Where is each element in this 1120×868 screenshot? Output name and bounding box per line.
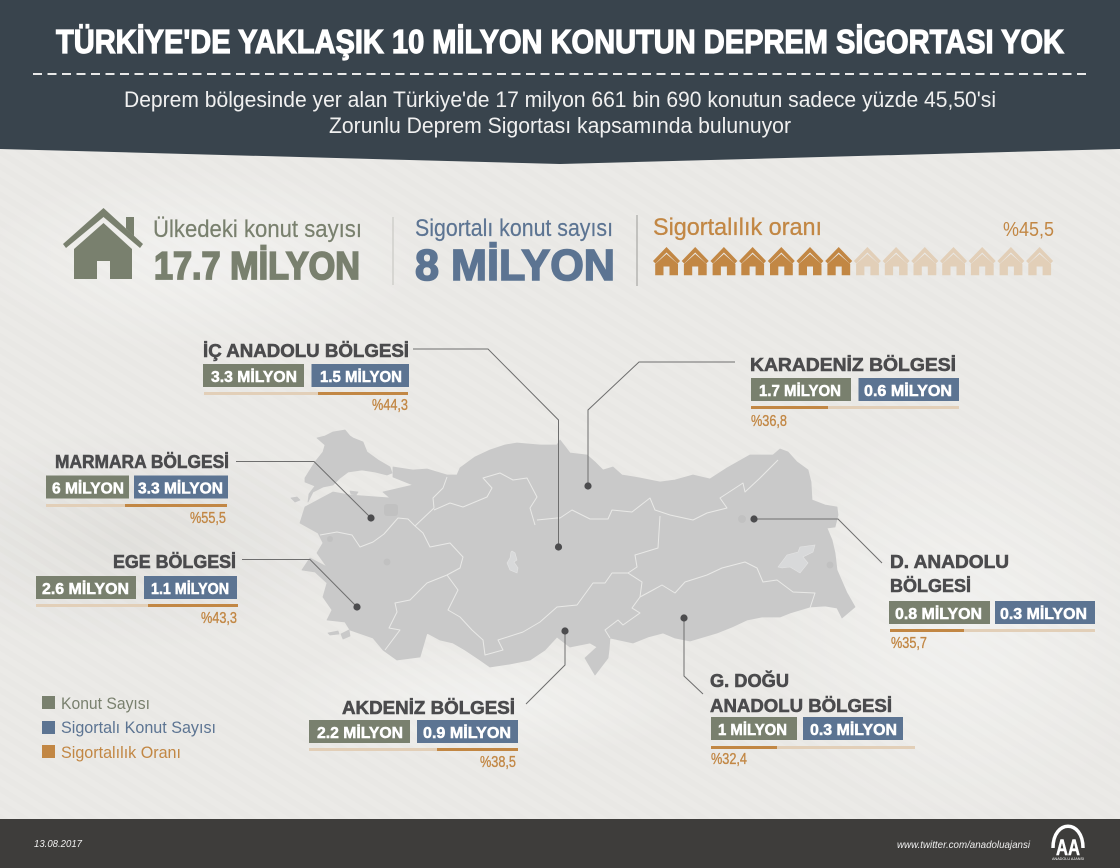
header banner xyxy=(0,0,1120,164)
rate bar: %32,4 xyxy=(711,751,747,768)
value boxes: 6 MİLYON xyxy=(52,480,124,498)
connector xyxy=(413,349,558,547)
connector xyxy=(242,560,357,607)
heading xyxy=(890,551,1009,596)
rate bar: %44,3 xyxy=(372,397,408,414)
subtitle xyxy=(124,87,996,138)
value boxes: 3.3 MİLYON xyxy=(211,368,297,386)
subtitle: Deprem bölgesinde yer alan Türkiye'de 17 milyon 661 bin 690 konutun sadece yüzde 45,50'si xyxy=(124,87,996,112)
connector xyxy=(236,462,371,518)
rate bar xyxy=(36,604,238,627)
rate bar xyxy=(309,748,518,771)
value boxes: 0.3 MİLYON xyxy=(810,721,897,739)
logo: Anadolu Ajansı: AA xyxy=(1056,835,1080,860)
connector xyxy=(754,519,882,563)
rate bar xyxy=(890,629,1095,652)
source link: www.twitter.com/anadoluajansi xyxy=(897,839,1031,851)
value: 17.7 MİLYON xyxy=(154,245,360,288)
reservoir patches xyxy=(327,504,834,568)
region: Ege xyxy=(36,551,361,627)
legend: Konut Sayısı xyxy=(61,694,150,713)
value boxes: 1 MİLYON xyxy=(718,721,787,739)
heading: KARADENİZ BÖLGESİ xyxy=(750,354,956,375)
heading: ANADOLU BÖLGESİ xyxy=(710,695,892,716)
legend xyxy=(42,694,216,762)
footer xyxy=(0,819,1120,868)
logo: Anadolu Ajansı: ANADOLU AJANSI xyxy=(1052,857,1084,861)
region: Karadeniz xyxy=(584,354,959,490)
value boxes: 1.5 MİLYON xyxy=(320,368,402,386)
rate bar: %35,7 xyxy=(891,635,927,652)
region borders xyxy=(320,460,815,655)
region: Güneydoğu Anadolu xyxy=(680,614,915,768)
rate bar xyxy=(751,406,959,430)
rate bar: %55,5 xyxy=(190,510,226,527)
value boxes xyxy=(203,364,409,387)
legend: Sigortalı Konut Sayısı xyxy=(61,718,216,737)
legend: Sigortalılık Oranı xyxy=(61,743,181,762)
rate bar: %43,3 xyxy=(201,610,237,627)
lake: Tuz xyxy=(507,551,518,573)
value boxes: 1.7 MİLYON xyxy=(759,382,841,400)
heading xyxy=(710,670,892,716)
value: %45,5 xyxy=(1003,219,1054,241)
rate bar: %36,8 xyxy=(751,413,787,430)
value boxes: 1.1 MİLYON xyxy=(151,580,229,598)
heading: G. DOĞU xyxy=(710,670,789,691)
subtitle: Zorunlu Deprem Sigortası kapsamında bulunuyor xyxy=(329,113,791,138)
value boxes xyxy=(36,576,237,599)
region: Akdeniz xyxy=(309,627,569,771)
icon: large house xyxy=(63,208,143,279)
value boxes xyxy=(46,476,228,498)
date: 13.08.2017 xyxy=(34,839,82,850)
rate bar: %38,5 xyxy=(480,754,516,771)
value boxes: 3.3 MİLYON xyxy=(138,480,223,498)
label: Sigortalı konut sayısı xyxy=(415,215,613,242)
heading: AKDENİZ BÖLGESİ xyxy=(342,697,515,718)
region: Marmara xyxy=(46,451,375,527)
stat: total housing xyxy=(63,208,362,288)
value boxes: 2.6 MİLYON xyxy=(42,580,129,598)
connector xyxy=(588,362,735,486)
rate bar xyxy=(46,504,227,527)
heading: İÇ ANADOLU BÖLGESİ xyxy=(203,340,409,361)
stat: insurance rate xyxy=(653,214,1054,275)
house pictogram row xyxy=(653,247,1053,275)
heading: BÖLGESİ xyxy=(890,575,971,596)
label: Sigortalılık oranı xyxy=(653,214,822,241)
label: Ülkedeki konut sayısı xyxy=(153,216,362,243)
logo: Anadolu Ajansı xyxy=(1052,826,1084,861)
value boxes: 0.9 MİLYON xyxy=(423,724,511,742)
value boxes: 2.2 MİLYON xyxy=(317,724,403,742)
connector xyxy=(684,618,703,694)
value boxes xyxy=(889,601,1095,624)
value boxes: 0.8 MİLYON xyxy=(895,605,982,623)
region: Doğu Anadolu xyxy=(750,515,1095,652)
region: İç Anadolu xyxy=(203,340,562,551)
connector xyxy=(526,631,565,704)
rate bar xyxy=(204,392,408,414)
value: 8 MİLYON xyxy=(415,241,615,290)
value boxes xyxy=(711,717,903,740)
lake: Van xyxy=(778,545,815,573)
heading: D. ANADOLU xyxy=(890,551,1009,572)
value boxes xyxy=(751,378,959,401)
heading: EGE BÖLGESİ xyxy=(113,551,236,572)
value boxes: 0.6 MİLYON xyxy=(864,382,952,400)
heading: MARMARA BÖLGESİ xyxy=(55,451,229,472)
map of Turkey xyxy=(291,425,860,680)
rate bar xyxy=(711,746,915,768)
stat: insured housing xyxy=(415,215,615,290)
value boxes: 0.3 MİLYON xyxy=(1000,605,1087,623)
value boxes xyxy=(309,720,518,743)
